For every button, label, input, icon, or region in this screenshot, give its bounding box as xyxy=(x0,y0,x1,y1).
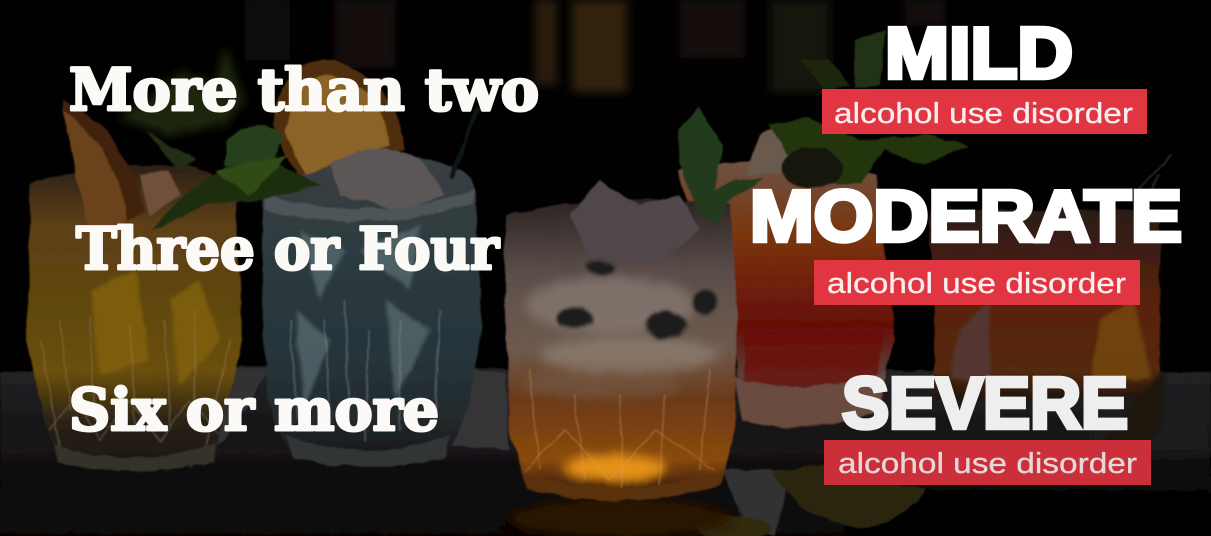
glass 3: centre, foreground xyxy=(505,107,762,501)
text: six or more: Six or more xyxy=(69,376,439,444)
mint sprig left xyxy=(145,126,320,232)
text: three or four: Three or Four xyxy=(76,215,500,283)
label: moderate: MODERATE xyxy=(750,177,1182,257)
label: mild: alcohol use disorder xyxy=(834,98,1133,130)
centre glass reflection on table xyxy=(508,498,732,536)
label: moderate xyxy=(750,177,1182,305)
blurred back mint xyxy=(115,45,245,135)
table surface xyxy=(0,366,1211,536)
text: more than two: More than two xyxy=(69,56,539,124)
label: mild: MILD xyxy=(885,14,1073,94)
glass 5: right amber-red xyxy=(930,155,1172,400)
right column: severity labels xyxy=(750,14,1182,485)
label: mild xyxy=(822,14,1147,134)
lime wedge foreground xyxy=(772,465,925,528)
glass 1: amber xyxy=(27,100,243,471)
bar bottles in the background xyxy=(245,0,945,92)
label: severe xyxy=(824,364,1151,485)
label: severe: SEVERE xyxy=(842,364,1128,444)
glass 4: red xyxy=(678,30,970,427)
label: moderate: alcohol use disorder xyxy=(827,268,1126,300)
label: severe: alcohol use disorder xyxy=(838,448,1137,480)
back orange slice xyxy=(272,60,404,180)
glass 2: blue-grey xyxy=(262,108,482,466)
left column: drink counts xyxy=(69,56,539,444)
